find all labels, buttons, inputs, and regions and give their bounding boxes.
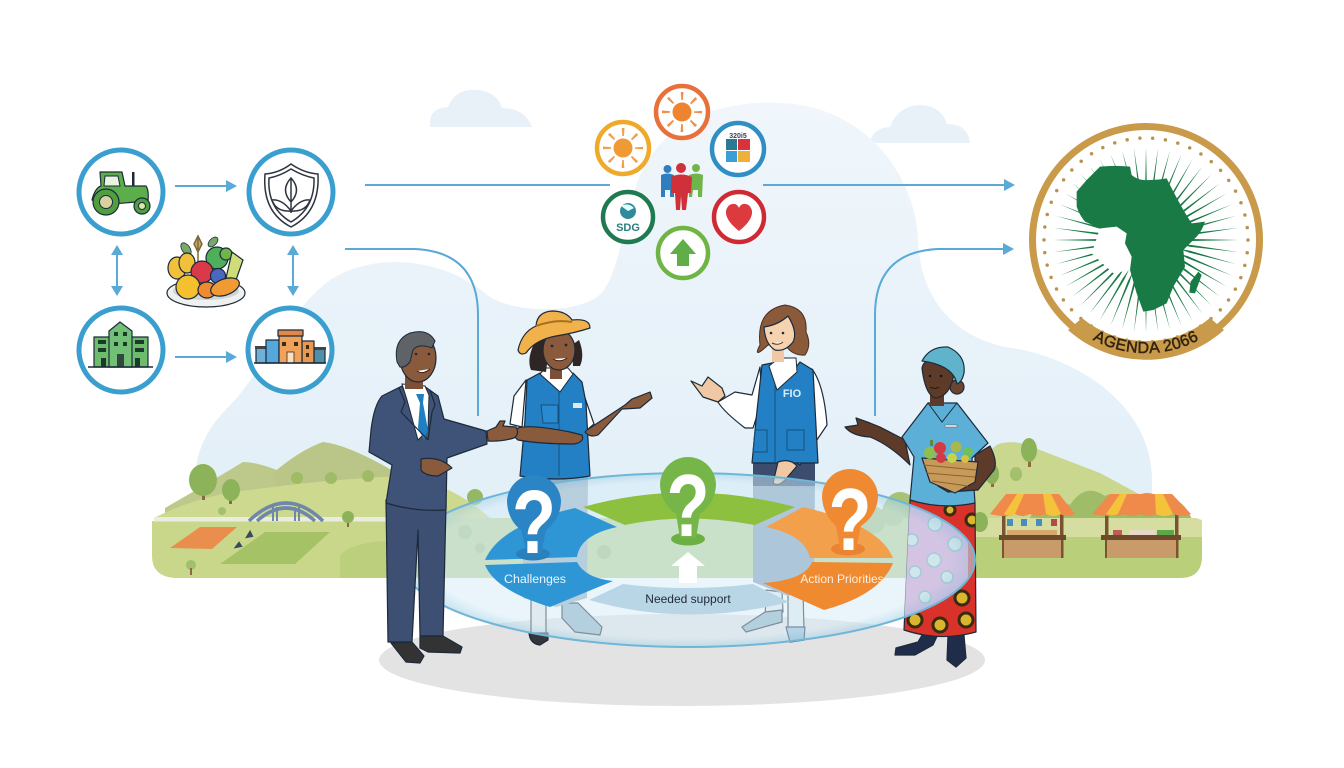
infographic scene	[76, 84, 1263, 706]
icon: red heart	[714, 192, 764, 242]
Africa silhouette	[1077, 166, 1205, 312]
arrow: building to town	[175, 351, 237, 363]
icon: orange sun	[656, 86, 708, 138]
glass discussion disc	[401, 473, 975, 647]
Agenda banner	[1068, 318, 1224, 360]
segment: needed support	[589, 584, 789, 615]
person: farmer woman with hat	[510, 311, 652, 645]
label: Needed support: Needed support	[645, 592, 731, 606]
market stall 1	[990, 494, 1075, 558]
arrow: shield and town two-way	[287, 245, 299, 296]
SDG icon cluster	[597, 86, 764, 278]
segment: blue upper	[485, 508, 617, 560]
arrow: tractor to shield	[175, 180, 237, 192]
landscape left: farmland	[152, 442, 490, 578]
patterned skirt	[904, 503, 978, 632]
connector: curve down to people	[345, 249, 478, 416]
orange field	[170, 527, 237, 549]
icon: town	[248, 308, 332, 392]
vest logo: FIO	[783, 388, 802, 400]
straw hat	[518, 311, 590, 354]
icon: SDG globe: SDG	[616, 222, 640, 234]
icon: fruit and vegetable plate	[167, 235, 245, 307]
farm workers	[236, 532, 252, 547]
icon: plant shield	[249, 150, 333, 234]
question pin: blue: ?	[512, 472, 556, 573]
icon: SDG globe	[603, 192, 653, 242]
Agenda seal	[1029, 123, 1263, 360]
connector: shield to SDG cluster	[365, 184, 610, 186]
market stall 2	[1092, 494, 1191, 558]
arrow: curve from people to Agenda seal	[875, 243, 1014, 416]
trees right	[972, 438, 1037, 532]
person: man in suit	[369, 332, 518, 663]
icon: green building	[79, 308, 163, 392]
Agenda label: AGENDA 2066	[1092, 331, 1198, 354]
trees	[186, 464, 374, 575]
landscape right: market	[972, 438, 1202, 578]
icon: green up arrow	[658, 228, 708, 278]
upper pasture band	[975, 518, 1202, 537]
segment: green top	[583, 492, 795, 525]
bridge	[249, 503, 323, 521]
arrow: tractor and building two-way	[111, 245, 123, 296]
cloud right	[870, 105, 970, 143]
icon: tractor	[79, 150, 163, 234]
segment: orange upper	[766, 507, 893, 558]
green field	[220, 532, 330, 564]
arrow: SDG cluster to Agenda seal	[763, 179, 1015, 191]
dotted star ring	[1044, 138, 1248, 342]
person: FAO woman	[691, 305, 827, 642]
ground shadow ellipse	[379, 614, 985, 706]
landscape seen through the disc	[400, 489, 976, 578]
arrow: white up arrow	[671, 552, 705, 583]
person: market woman with basket	[845, 347, 995, 667]
sun rays	[1053, 147, 1239, 333]
label: Challenges: Challenges	[504, 572, 566, 586]
segment: blue lower	[485, 562, 613, 607]
fruit basket	[922, 440, 978, 493]
question pin: orange: ?	[829, 470, 871, 569]
icon: group of people	[661, 163, 703, 210]
icon: coloured squares	[712, 123, 764, 175]
icon: yellow sun	[597, 122, 649, 174]
segment: orange lower	[763, 562, 893, 610]
label: Action Priorities: Action Priorities	[800, 572, 884, 586]
background blob	[195, 103, 1152, 520]
question pin: green: ?	[667, 456, 709, 555]
cloud left	[430, 90, 532, 127]
icon: coloured squares: 320i5	[729, 133, 747, 140]
